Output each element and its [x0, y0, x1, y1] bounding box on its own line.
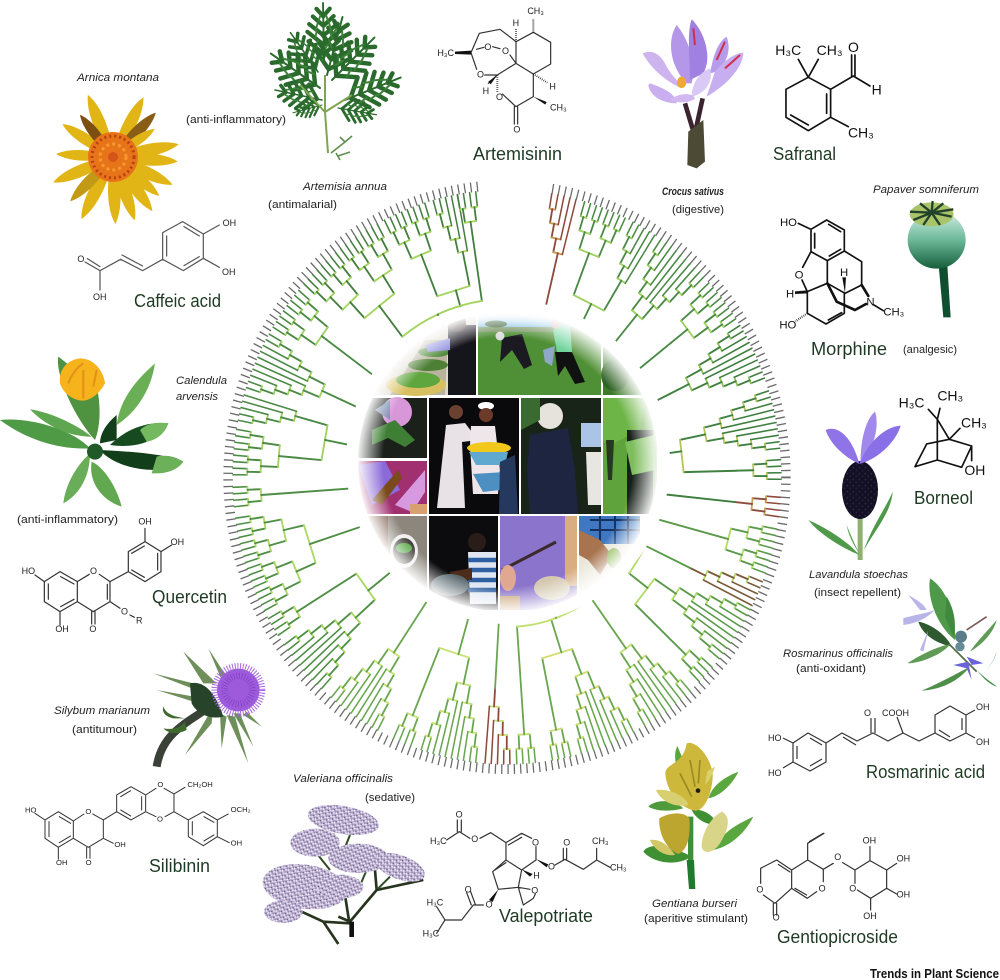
molecule: borneol [899, 388, 987, 478]
molecule: valepotriate: H₃C [430, 836, 447, 846]
molecule: morphine: HO [779, 320, 797, 332]
label: antitumour: (antitumour) [72, 724, 137, 736]
molecule: silibinin: OCH₂ [231, 805, 251, 814]
molecule: valepotriate: O [548, 861, 555, 871]
molecule: borneol: OH [964, 462, 985, 478]
molecule: valepotriate: O [471, 834, 478, 844]
molecule: safranal: H [872, 82, 882, 98]
label: Calendula arvensis: arvensis [176, 391, 219, 403]
molecule: morphine: H [786, 288, 794, 300]
molecule: caffeic acid: O [77, 254, 84, 264]
molecule: caffeic acid [77, 218, 236, 302]
photo: man with leaves [603, 398, 657, 514]
photo: person in striped shirt [429, 516, 498, 610]
molecule: silibinin: O [157, 815, 163, 824]
photo: fabric [358, 461, 427, 514]
molecule: silibinin: OH [231, 838, 242, 847]
molecule: morphine [779, 217, 904, 332]
molecule: gentiopicroside: O [773, 913, 780, 923]
molecule: silibinin: CH₂OH [187, 780, 213, 789]
molecule: morphine: H [840, 267, 848, 279]
plant: Lavandula stoechas [808, 412, 901, 560]
name: Gentiopicroside: Gentiopicroside [777, 927, 898, 947]
photo: women with yellow flowers [429, 398, 519, 514]
plant: Artemisia annua [261, 3, 407, 160]
molecule: caffeic acid: OH [93, 292, 106, 302]
label: anti-oxidant: (anti-oxidant) [796, 663, 866, 675]
plant: Papaver somniferum [908, 201, 966, 317]
molecule: morphine: O [795, 269, 804, 281]
molecule: artemisinin: H₃C [437, 48, 455, 58]
label: digestive: (digestive) [672, 204, 724, 216]
name: Quercetin: Quercetin [152, 587, 227, 607]
molecule: valepotriate: O [563, 837, 570, 847]
molecule: silibinin: O [86, 858, 92, 867]
molecule: artemisinin: H [549, 81, 556, 91]
molecule: silibinin: O [85, 807, 91, 816]
plant: Rosmarinus officinalis [903, 578, 997, 691]
clade: left [227, 284, 692, 670]
molecule: quercetin: O [90, 566, 97, 576]
name: Borneol: Borneol [914, 488, 973, 508]
photo: bowl of herbs [368, 516, 427, 588]
molecule: artemisinin: H [513, 18, 519, 28]
label: Artemisia annua: Artemisia annua [302, 181, 387, 193]
molecule: safranal: H₃C [775, 42, 801, 58]
molecule: valepotriate: H₃C [427, 897, 444, 907]
plant: Silybum marianum [153, 648, 262, 767]
molecule: rosmarinic acid: HO [768, 733, 782, 743]
molecule: quercetin: O [121, 607, 128, 617]
clade: right [296, 256, 785, 698]
plant: Gentiana burseri [643, 743, 753, 889]
label: Silybum marianum: Silybum marianum [54, 705, 150, 717]
photo: pink flower [358, 397, 427, 458]
photo: green foliage top [601, 346, 642, 395]
molecule: quercetin: OH [138, 517, 152, 527]
molecule: valepotriate: O [531, 885, 538, 895]
molecule: silibinin: HO [25, 806, 37, 815]
clade: bottom right [307, 267, 707, 764]
name: Rosmarinic acid: Rosmarinic acid [866, 762, 985, 782]
molecule: rosmarinic acid [768, 702, 990, 778]
photo: purple shirt [500, 516, 577, 610]
name: Safranal: Safranal [773, 144, 836, 164]
label: Papaver somniferum: Papaver somniferum [873, 184, 979, 196]
molecule: valepotriate: H₃C [423, 929, 440, 939]
label: anti-inflammatory: (anti-inflammatory) [186, 114, 286, 126]
molecule: gentiopicroside: O [834, 852, 841, 862]
photo: market table [376, 318, 476, 396]
photo: woman in garden [521, 398, 601, 514]
molecule: gentiopicroside: O [756, 885, 763, 895]
molecule: gentiopicroside: OH [897, 889, 910, 899]
molecule: valepotriate [423, 810, 627, 939]
molecule: artemisinin: O [477, 69, 484, 79]
name: Caffeic acid: Caffeic acid [134, 291, 221, 311]
label: Gentiana burseri: Gentiana burseri [652, 898, 738, 910]
label: aperitive stimulant: (aperitive stimulant) [644, 913, 748, 925]
molecule: rosmarinic acid: OH [976, 737, 990, 747]
molecule: safranal: O [848, 39, 859, 55]
molecule: rosmarinic acid: COOH [882, 708, 909, 718]
photo: field harvest [478, 313, 601, 395]
molecule: rosmarinic acid: HO [768, 768, 782, 778]
molecule: valepotriate: O [456, 810, 463, 820]
clade: lower left [231, 259, 715, 695]
molecule: valepotriate: CH₃ [592, 836, 609, 846]
molecule: quercetin: R [136, 616, 143, 626]
plant: Calendula arvensis [0, 357, 183, 507]
molecule: artemisinin: O [496, 92, 503, 102]
name: Morphine: Morphine [811, 339, 887, 359]
molecule: silibinin: O [157, 780, 163, 789]
label: Lavandula stoechas: Lavandula stoechas [809, 569, 908, 581]
photo: hands and plaid shirt [579, 516, 640, 590]
clade: lower right [320, 281, 778, 684]
name: Artemisinin: Artemisinin [473, 144, 562, 164]
label: Rosmarinus officinalis: Rosmarinus officinalis [783, 648, 894, 660]
molecule: artemisinin: CH₃ [527, 6, 544, 16]
molecule: silibinin [25, 780, 251, 867]
molecule: artemisinin: CH₃ [550, 103, 567, 113]
molecule: valepotriate: O [465, 885, 472, 895]
molecule: quercetin: OH [55, 624, 69, 634]
molecule: silibinin: OH [56, 858, 67, 867]
molecule: artemisinin: O [513, 125, 520, 135]
molecule: caffeic acid: OH [223, 218, 236, 228]
plant: Valeriana officinalis [260, 800, 429, 944]
molecule: borneol: CH₃ [961, 414, 987, 430]
molecule: artemisinin: O [484, 42, 491, 52]
molecule: quercetin: O [89, 624, 96, 634]
molecule: gentiopicroside: OH [863, 911, 877, 921]
label: Calendula arvensis: Calendula [176, 375, 227, 387]
molecule: valepotriate: H [533, 871, 540, 881]
molecule: safranal [775, 39, 882, 140]
molecule: artemisinin: O [502, 46, 509, 56]
clade: bottom left [330, 325, 653, 767]
clade: upper left [268, 192, 746, 727]
molecule: quercetin: OH [171, 537, 184, 547]
molecule: borneol: CH₃ [937, 388, 963, 404]
molecule: caffeic acid: OH [222, 267, 235, 277]
label: Crocus sativus: Crocus sativus [662, 186, 724, 198]
central photo collage [346, 300, 670, 624]
molecule: silibinin: OH [114, 840, 126, 849]
molecule: rosmarinic acid: OH [976, 702, 990, 712]
plant: Arnica montana [51, 93, 180, 224]
molecule: safranal: CH₃ [848, 124, 874, 140]
label: insect repellent: (insect repellent) [814, 587, 901, 599]
molecule: valepotriate: O [486, 899, 493, 909]
label: Valeriana officinalis: Valeriana officinalis [293, 773, 394, 785]
label: Arnica montana: Arnica montana [76, 72, 159, 84]
molecule: quercetin: HO [22, 566, 35, 576]
molecule: gentiopicroside [756, 833, 910, 923]
name: Valepotriate: Valepotriate [499, 906, 593, 926]
molecule: morphine: HO [780, 217, 797, 229]
molecule: borneol: H₃C [899, 394, 925, 410]
phylogenetic tree [203, 158, 811, 796]
label: sedative: (sedative) [365, 792, 415, 804]
molecule: morphine: N [866, 296, 875, 308]
molecule: morphine: CH₃ [883, 306, 904, 318]
clade: upper right [309, 194, 736, 684]
molecule: valepotriate: O [532, 837, 539, 847]
molecule: safranal: CH₃ [817, 42, 843, 58]
molecule: rosmarinic acid: O [864, 708, 871, 718]
name: Silibinin: Silibinin [149, 856, 210, 876]
label: antimalarial: (antimalarial) [268, 199, 337, 211]
molecule: artemisinin [437, 6, 567, 135]
molecule: artemisinin: H [483, 86, 489, 96]
label: anti-inflammatory: (anti-inflammatory) [17, 514, 118, 526]
molecule: gentiopicroside: OH [897, 854, 910, 864]
plant: Crocus sativus [643, 19, 743, 168]
molecule: quercetin [22, 517, 184, 634]
molecule: gentiopicroside: O [849, 884, 856, 894]
label: analgesic: (analgesic) [903, 344, 957, 356]
tip tick ring [228, 185, 786, 769]
molecule: gentiopicroside: O [819, 884, 826, 894]
molecule: gentiopicroside: OH [863, 836, 876, 846]
molecule: valepotriate: CH₃ [610, 863, 627, 873]
